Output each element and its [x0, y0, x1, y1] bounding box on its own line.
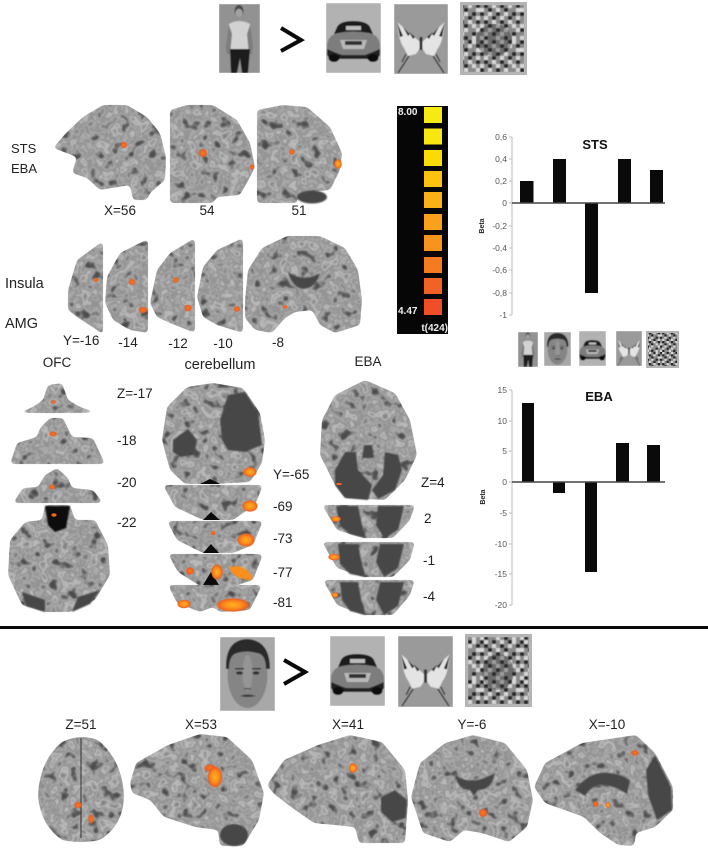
icon: butterfly stimulus [398, 636, 453, 707]
panel: cerebellum slices [162, 357, 309, 612]
heading: cerebellum: cerebellum [185, 357, 255, 373]
icon: body stimulus [219, 4, 260, 73]
slice X=41 [267, 717, 408, 843]
slice labels: -1 [423, 553, 435, 568]
slice labels: -81 [273, 595, 293, 610]
stimulus row: body greater than objects [219, 2, 527, 75]
bar chart: STS: 0,4 [495, 154, 507, 164]
icon: car stimulus [330, 636, 385, 706]
section divider [0, 626, 708, 629]
icon: greater than symbol [284, 660, 305, 684]
colour scale [397, 106, 448, 334]
bar chart: STS: 0,6 [495, 132, 507, 142]
labels: STS EBA [11, 141, 37, 176]
slice X=53 [130, 717, 264, 846]
slice labels [273, 467, 309, 610]
colour scale: 4.47 [398, 306, 418, 317]
labels: STS EBA: STS [11, 141, 37, 156]
bar chart: EBA: 15 [498, 385, 507, 395]
slice labels: -14 [118, 335, 138, 350]
slice Y=-6: Y=-6 [458, 717, 486, 732]
panel: OFC axial slices [8, 355, 153, 612]
brain slice Y=-16 [68, 241, 103, 335]
slice X=53: X=53 [185, 717, 217, 732]
slice X=-10: X=-10 [589, 717, 625, 732]
slice labels: Y=-16 [63, 333, 99, 348]
slice labels [104, 203, 307, 218]
slice Y=-69 [163, 485, 263, 520]
panel: EBA axial slices [320, 354, 445, 615]
bar chart: STS: -0,4 [492, 243, 507, 253]
bar chart: STS: -0,6 [492, 265, 507, 275]
bar chart: EBA: 5 [502, 446, 507, 456]
bar chart: STS: Beta [479, 218, 486, 234]
stimulus row: face greater than objects [220, 634, 532, 711]
labels: STS EBA: EBA [11, 161, 37, 176]
slice labels: -8 [272, 335, 284, 350]
panel: face-selective brain slices [38, 717, 673, 846]
bar chart: STS: 0,2 [495, 176, 507, 186]
bar chart: STS: -1 [499, 310, 507, 320]
bar chart: STS: -0,2 [492, 221, 507, 231]
icon: scrambled noise stimulus [460, 2, 527, 75]
slice Y=-73 [167, 521, 263, 553]
slice Z=2 [322, 505, 415, 538]
slice labels: 51 [291, 203, 307, 218]
bar chart: EBA: Beta [480, 489, 487, 505]
brain slice X=51 [257, 105, 342, 204]
icon: butterfly stimulus [394, 4, 448, 74]
bar chart: EBA: EBA [585, 389, 613, 404]
slice labels [117, 386, 153, 530]
slice Y=-77 [168, 554, 263, 586]
slice Y=-81 [168, 585, 262, 612]
slice Y=-6 [411, 717, 533, 842]
slice Z=-1 [322, 542, 415, 577]
bar chart: EBA: -15 [495, 569, 507, 579]
icon: greater than symbol [281, 28, 301, 51]
slice labels: 2 [424, 511, 432, 526]
bar chart: EBA: 0 [502, 477, 507, 487]
slice labels: Z=4 [421, 475, 445, 490]
bar chart: EBA: -20 [495, 600, 507, 610]
slice Z=-20 [13, 468, 103, 503]
slice Z=-22 [8, 505, 110, 612]
slice labels: -77 [273, 565, 293, 580]
icon: face stimulus [220, 637, 275, 711]
slice labels: X=56 [104, 203, 136, 218]
panel: insula and amygdala coronal slices [5, 236, 362, 351]
colour scale: t(424) [421, 323, 448, 334]
brain slice Y=-12 [150, 238, 195, 333]
slice labels: -22 [117, 515, 137, 530]
bar chart: STS [479, 132, 665, 320]
slice Y=-65 [162, 383, 265, 484]
panel: STS and EBA sagittal slices [11, 105, 342, 218]
stimulus icons under STS chart [518, 331, 679, 368]
bar chart: STS: STS [582, 137, 608, 152]
slice labels: -12 [168, 336, 188, 351]
brain slice X=54 [170, 105, 255, 203]
labels: Insula AMG: AMG [5, 316, 38, 332]
slice X=-10 [534, 717, 673, 846]
bar chart: STS: -0,8 [492, 288, 507, 298]
slice labels: 54 [199, 203, 215, 218]
bar chart: EBA [480, 385, 665, 610]
bar chart: EBA: -10 [495, 539, 507, 549]
slice labels: -18 [117, 433, 137, 448]
brain slice X=56 [53, 105, 166, 200]
slice labels [63, 333, 284, 351]
brain slice Y=-8 [245, 236, 362, 333]
slice Z=4 [320, 380, 417, 500]
colour scale: 8.00 [398, 107, 418, 118]
slice Z=-4 [323, 580, 415, 615]
slice Z=51: Z=51 [65, 717, 97, 732]
slice labels: -4 [423, 589, 435, 604]
slice Z=51 [38, 717, 124, 842]
slice labels: -20 [117, 475, 137, 490]
heading: EBA: EBA [354, 354, 382, 369]
labels: Insula AMG [5, 276, 45, 332]
slice labels: -10 [213, 336, 233, 351]
slice Z=-18 [10, 418, 105, 464]
slice labels: Y=-65 [273, 467, 309, 482]
bar chart: STS: 0 [502, 198, 507, 208]
icon: scrambled noise stimulus [465, 634, 532, 707]
icon: car stimulus [326, 3, 381, 73]
slice labels: -73 [273, 531, 293, 546]
slice labels: Z=-17 [117, 386, 153, 401]
bar chart: EBA: -5 [499, 508, 507, 518]
bar chart: EBA: 10 [498, 416, 507, 426]
heading: OFC: OFC [43, 355, 71, 370]
slice Z=-17 [17, 383, 99, 413]
labels: Insula AMG: Insula [5, 276, 45, 292]
slice X=41: X=41 [332, 717, 364, 732]
brain slice Y=-10 [197, 238, 243, 333]
brain slice Y=-14 [105, 239, 148, 333]
slice labels: -69 [273, 499, 293, 514]
slice labels [421, 475, 445, 604]
